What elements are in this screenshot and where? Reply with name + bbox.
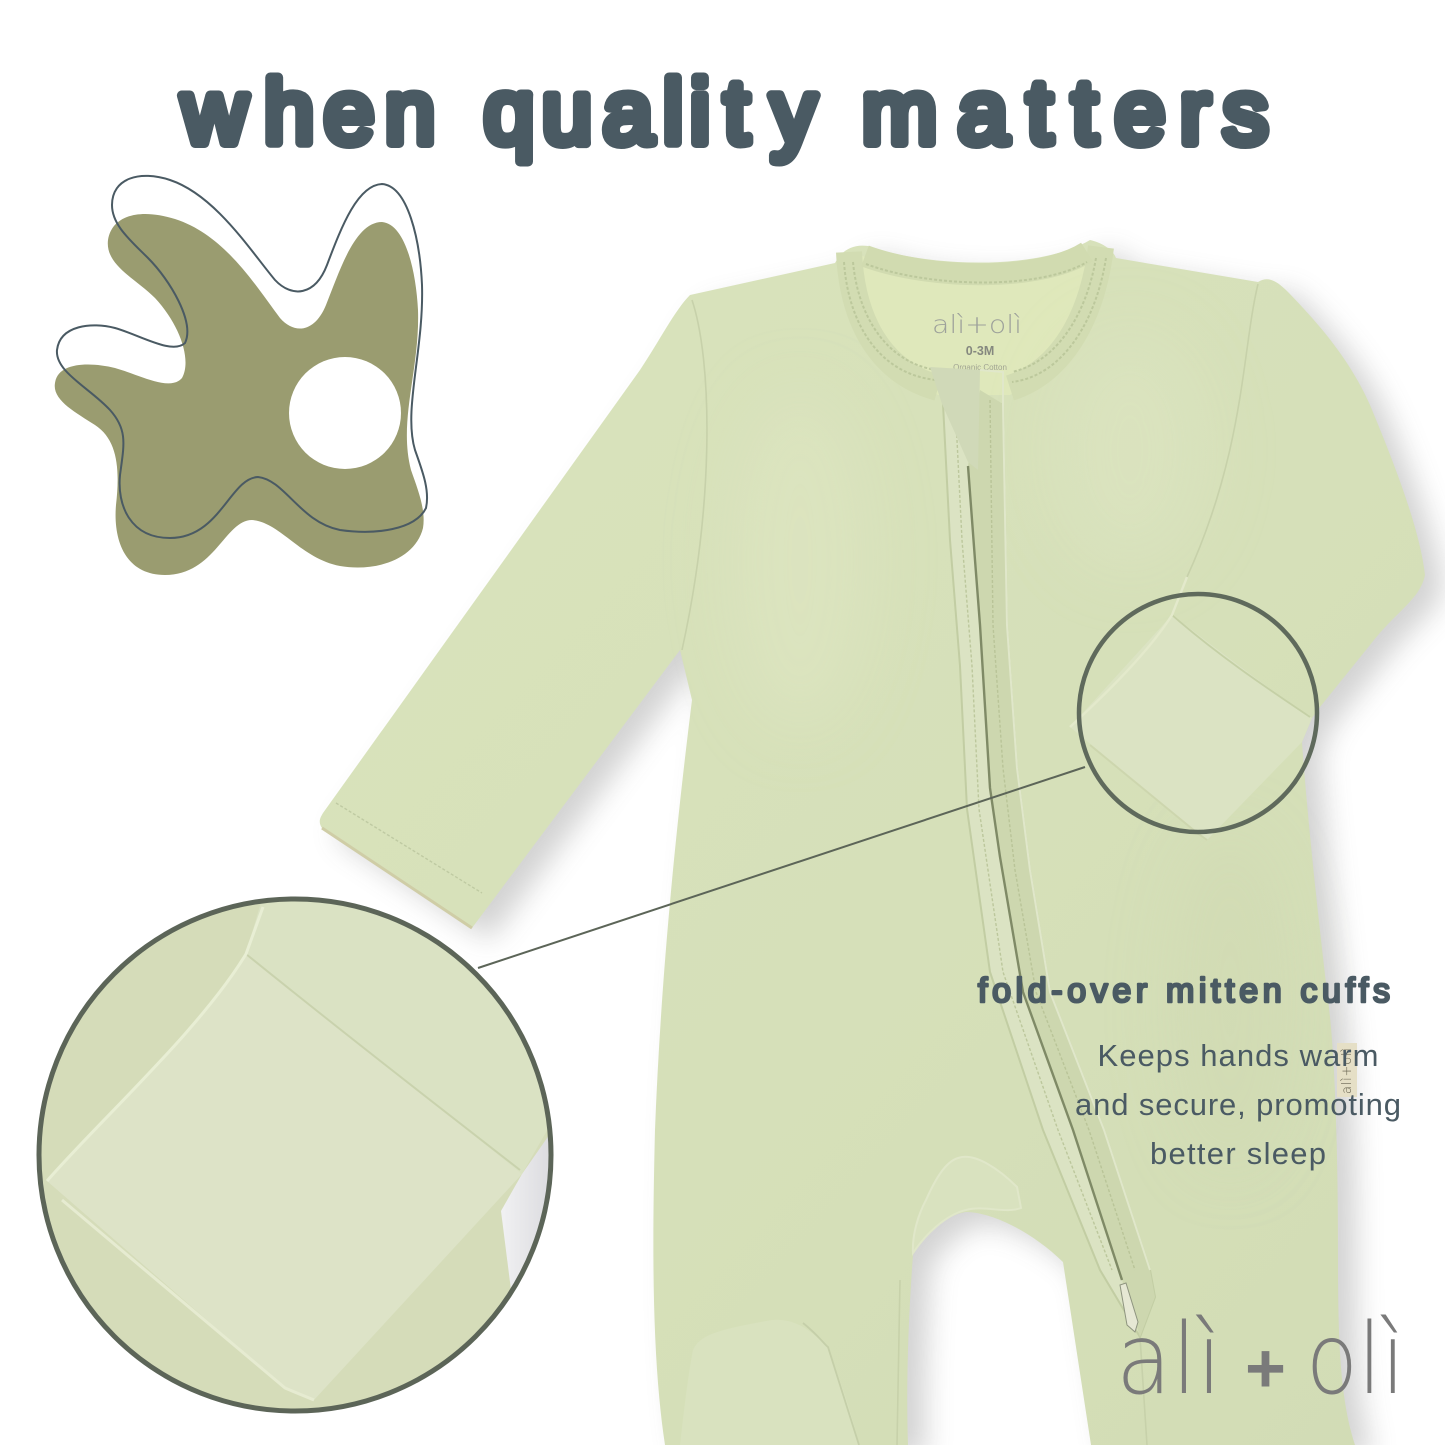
foot: [680, 1320, 859, 1445]
collar: [844, 247, 1106, 388]
folded cuff panel: [47, 954, 522, 1400]
feature heading: fold-over mitten cuffs: [978, 972, 1390, 1010]
brand logo: +: [1245, 1329, 1286, 1407]
feature description: better sleep: [1150, 1136, 1326, 1171]
grey background wedge: [501, 1137, 548, 1288]
title: quality: [484, 63, 816, 163]
decorative organic blob: [55, 176, 427, 575]
brand logo: alì: [1116, 1303, 1222, 1417]
garment shadow: [338, 252, 1443, 1445]
feature description: Keeps hands warm: [1098, 1038, 1378, 1073]
title: [181, 63, 1268, 163]
sleeve hem: [322, 803, 482, 928]
seams: [682, 284, 1258, 1445]
small callout circle: [1079, 594, 1317, 832]
sewn-in side tag: [1337, 1043, 1357, 1097]
brand logo: olì: [1306, 1303, 1405, 1417]
magnified cuff circle: [39, 880, 620, 1411]
neck inner: [860, 255, 1088, 395]
title: matters: [862, 63, 1268, 163]
leader line: [478, 767, 1085, 968]
sewn-in side tag: alì+olì: [1340, 1048, 1355, 1094]
fabric shading: [730, 330, 1290, 1170]
zipper pull: [1120, 1283, 1138, 1332]
neck label logo: alì+olì: [932, 310, 1022, 339]
neck label fabric note: Organic Cotton: [953, 363, 1007, 372]
folded mitten cuff: [1070, 577, 1312, 840]
footed onesie: [320, 240, 1425, 1445]
neck label size: 0-3M: [966, 344, 994, 358]
feature description: [1075, 1038, 1401, 1171]
feature description: and secure, promoting: [1075, 1087, 1401, 1122]
brand logo: [1116, 1303, 1405, 1417]
onesie body: [320, 240, 1425, 1445]
title: when: [181, 63, 435, 163]
zipper placket: [930, 367, 1155, 1337]
upper sleeve: [248, 902, 547, 1174]
crotch fold: [913, 1157, 1021, 1253]
